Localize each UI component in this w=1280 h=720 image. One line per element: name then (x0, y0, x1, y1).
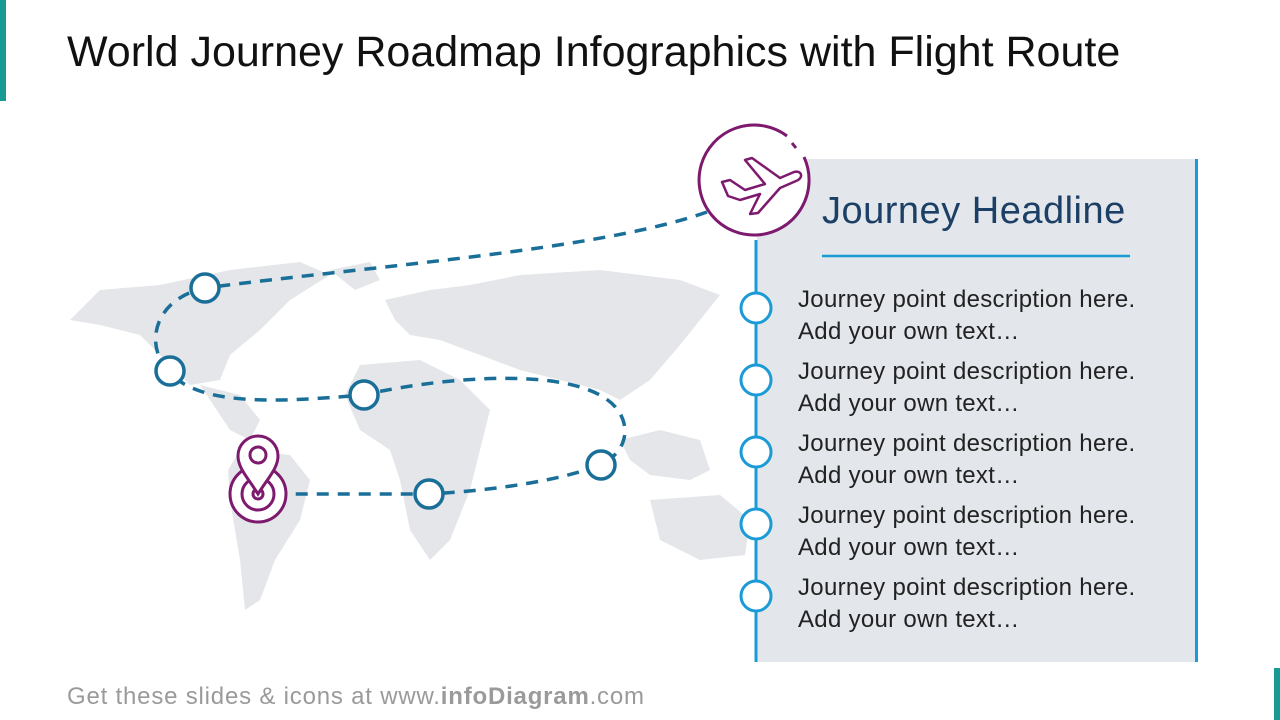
icon: location pin (230, 436, 286, 522)
route points (156, 274, 615, 508)
text: Add your own text… (798, 534, 1020, 561)
accent bar (0, 0, 6, 101)
title: World Journey Roadmap Infographics with Flight Route (67, 28, 1120, 76)
footer: Get these slides & icons at www.infoDiagram.com (67, 683, 645, 710)
corner accent (1274, 668, 1280, 720)
headline underline (822, 255, 1130, 257)
text blocks: Add your own text… (798, 318, 1020, 345)
timeline line (754, 240, 758, 662)
text blocks (798, 286, 1136, 345)
text: Add your own text… (798, 462, 1020, 489)
text: Add your own text… (798, 390, 1020, 417)
text: Journey point description here. (798, 574, 1136, 601)
text blocks: Journey point description here. (798, 286, 1136, 313)
text: Journey point description here. (798, 502, 1136, 529)
text: Journey point description here. (798, 358, 1136, 385)
dashed route (156, 212, 707, 494)
text: Add your own text… (798, 606, 1020, 633)
timeline points (741, 293, 771, 611)
world map (70, 262, 750, 610)
panel: text background (757, 159, 1198, 662)
icon: plane circle (699, 125, 809, 235)
headline: Journey Headline (822, 190, 1126, 232)
text: Journey point description here. (798, 430, 1136, 457)
